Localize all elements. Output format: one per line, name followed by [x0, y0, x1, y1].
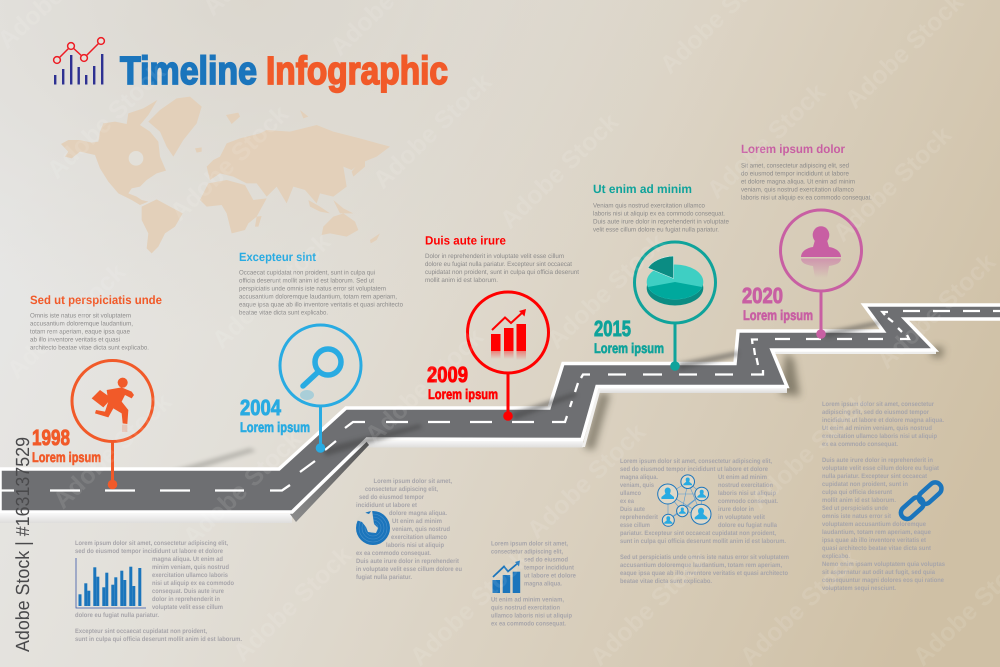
- text block: Excepteur sint: perspiciatis unde omnis iste natus error sit voluptatem: [239, 286, 386, 292]
- watermarks: Adobe Stock: [207, 228, 336, 354]
- pin: [280, 325, 361, 453]
- text: Duis aute irure dolor in reprehenderit: [356, 558, 460, 565]
- text block: Excepteur sint: officia deserunt mollit anim id est laborum. Sed ut: [239, 278, 374, 284]
- text block: Ut enim ad minim: [593, 182, 729, 234]
- text block: Duis aute irure: [425, 234, 579, 284]
- milestone 2015: [594, 242, 716, 371]
- text: explicabo.: [822, 553, 850, 560]
- text: pariatur. Excepteur sint occaecat cupidatat non proident,: [620, 530, 776, 537]
- text: ex ea: [620, 498, 634, 505]
- watermarks: Adobe Stock: [522, 418, 651, 544]
- text: Sed ut perspiciatis unde: [822, 505, 888, 512]
- road: [0, 305, 1000, 523]
- text: Ut enim ad minim: [718, 474, 767, 481]
- text: sed do eiusmod tempor incididunt ut labore et dolore: [75, 548, 223, 555]
- text: ullamco: [620, 490, 641, 497]
- icon: runner: [92, 378, 134, 432]
- text: Lorem ipsum dolor sit amet,: [374, 478, 452, 485]
- text: Sed ut perspiciatis unde omnis iste natus error sit voluptatem: [620, 554, 789, 561]
- lower text block with radial icon: [356, 478, 462, 581]
- text: esse cillum: [620, 522, 650, 529]
- icon: magnifier: [300, 349, 341, 400]
- text: magna aliqua. Ut enim ad: [152, 556, 223, 563]
- text: veniam, quis: [620, 482, 654, 489]
- text block: Duis aute irure: mollit anim id est laborum.: [425, 277, 498, 284]
- milestone 2020: [742, 210, 862, 339]
- lower text block with bar chart: [75, 540, 242, 643]
- text: dolore eu fugiat nulla pariatur.: [75, 612, 159, 619]
- text: Ut enim ad minim veniam, quis nostrud: [822, 425, 932, 432]
- text: consectetur adipiscing elit,: [491, 548, 563, 556]
- text: ex ea commodo consequat.: [356, 550, 431, 557]
- icon: rising bars: [491, 309, 526, 360]
- label: Lorem ipsum: [32, 449, 101, 465]
- watermarks: Adobe Stock: [542, 228, 671, 354]
- year: 2009: [427, 362, 468, 387]
- watermarks: Adobe Stock: [368, 68, 497, 194]
- text: consectetur adipiscing elit,: [365, 486, 438, 493]
- text: laboris nisi ut aliquip: [718, 490, 776, 497]
- text: Lorem ipsum dolor sit amet, consectetur adipiscing elit,: [620, 458, 772, 465]
- title: [120, 49, 448, 93]
- text: voluptatem sequi nesciunt.: [822, 585, 896, 592]
- text: dolor in reprehenderit in: [152, 596, 220, 603]
- watermarks: Adobe Stock: [178, 425, 307, 551]
- icon: radial chart: [356, 510, 390, 545]
- text: in voluptate velit: [718, 514, 766, 521]
- text: voluptate velit esse cillum dolore eu fugiat: [822, 465, 940, 472]
- lower text block with growth icon: [491, 540, 576, 628]
- text: cupidatat non proident, sunt in: [822, 481, 908, 488]
- lower text block with chain icon: [822, 401, 945, 592]
- watermarks: Adobe Stock: [2, 258, 131, 384]
- text block: Duis aute irure: cupidatat non proident, sunt in culpa qui officia deserunt: [425, 269, 579, 276]
- text: reprehenderit: [620, 514, 659, 521]
- text block: Duis aute irure: Dolor in reprehenderit in voluptate velit esse cillum: [425, 253, 564, 260]
- text: culpa qui officia deserunt: [822, 489, 893, 496]
- watermarks: Adobe Stock: [495, 108, 624, 234]
- text: Lorem ipsum dolor sit amet, consectetur: [822, 401, 934, 408]
- year: 2004: [240, 395, 282, 420]
- vertical stock id: Adobe Stock | #163137529: [13, 437, 34, 652]
- icon: bar chart: [76, 558, 146, 608]
- lower text block with network icon: [620, 458, 789, 585]
- text block: Excepteur sint: accusantium doloremque laudantium, totam rem aperiam,: [239, 294, 397, 300]
- text block: Sed ut perspiciatis unde: architecto beatae vitae dicta sunt explicabo.: [30, 344, 149, 352]
- text: minim veniam, quis nostrud: [152, 564, 229, 571]
- text block: Sed ut perspiciatis unde: Omnis iste natus error sit voluptatem: [30, 312, 131, 320]
- text: nostrud exercitation: [718, 482, 773, 489]
- icon: people network: [658, 475, 711, 526]
- text: irure dolor in: [718, 506, 754, 513]
- text: mollit anim id est laborum.: [822, 497, 896, 504]
- label: Lorem ipsum: [428, 386, 498, 402]
- text: sit aspernatur aut odit aut fugit, sed quia: [822, 569, 935, 576]
- text: sunt in culpa qui officia deserunt mollit anim id est laborum.: [620, 538, 786, 545]
- text: voluptatem accusantium doloremque: [822, 521, 926, 528]
- text: consequat. Duis aute irure: [152, 588, 224, 595]
- title: Infographic: [266, 49, 448, 93]
- text: exercitation ullamco: [391, 534, 447, 541]
- text: [822, 401, 945, 592]
- text: beatae vitae dicta sunt explicabo.: [620, 578, 712, 585]
- watermarks: Adobe Stock: [42, 58, 171, 184]
- text: Nemo enim ipsam voluptatem quia voluptas: [822, 561, 945, 568]
- year: 1998: [32, 425, 70, 450]
- text block: Sed ut perspiciatis unde: totam rem aperiam, eaque ipsa quae: [30, 328, 130, 336]
- text: Lorem ipsum dolor sit amet, consectetur adipiscing elit,: [75, 540, 228, 547]
- text: veniam, quis nostrud: [392, 526, 450, 533]
- text block: Duis aute irure: Duis aute irure: [425, 234, 506, 248]
- text: Lorem ipsum dolor sit amet,: [491, 540, 568, 548]
- icon: growth chart: [492, 560, 520, 593]
- text: [620, 458, 789, 585]
- text: dolore magna aliqua.: [389, 510, 447, 517]
- text block: Duis aute irure: dolore eu fugiat nulla pariatur. Excepteur sint occaecat: [425, 261, 572, 268]
- text block: Sed ut perspiciatis unde: Sed ut perspiciatis unde: [30, 293, 162, 307]
- milestone 2009: [427, 292, 548, 421]
- text block: Excepteur sint: [239, 250, 403, 316]
- text: in voluptate velit esse cillum dolore eu: [356, 566, 462, 573]
- icon: 3D pie chart: [647, 256, 703, 306]
- text block: Sed ut perspiciatis unde: [30, 293, 162, 352]
- text block: Excepteur sint: Excepteur sint: [239, 250, 316, 264]
- text: tempor incididunt: [524, 564, 575, 572]
- text: eaque ipsa quae ab illo inventore veritatis et quasi architecto: [620, 570, 788, 577]
- text block: Ut enim ad minim: Veniam quis nostrud exercitation ullamco: [593, 202, 705, 210]
- text: sunt in culpa qui officia deserunt mollit anim id est laborum.: [75, 636, 242, 643]
- text: ex ea commodo consequat.: [822, 441, 898, 448]
- text: incididunt ut labore et dolore magna aliqua.: [822, 417, 944, 424]
- text: laudantium, totam rem aperiam, eaque: [822, 529, 931, 536]
- text: voluptate velit esse cillum: [152, 604, 223, 611]
- label: Lorem ipsum: [594, 340, 664, 356]
- watermarks: Adobe Stock: [165, 100, 294, 226]
- text: sed do eiusmod tempor incididunt ut labore et dolore: [620, 466, 768, 473]
- text block: Lorem ipsum dolor: Sit amet, consectetur adipiscing elit, sed: [741, 162, 849, 170]
- text block: Ut enim ad minim: laboris nisi ut aliquip ex ea commodo consequat.: [593, 210, 725, 218]
- text block: Excepteur sint: eaque ipsa quae ab illo inventore veritatis et quasi architecto: [239, 302, 403, 308]
- text: Ut enim ad minim: [392, 518, 442, 525]
- text: Ut enim ad minim veniam,: [491, 596, 564, 604]
- pin shadows on road: [322, 321, 880, 456]
- text: exercitation ullamco laboris: [152, 572, 228, 579]
- watermarks: Adobe Stock: [872, 248, 1000, 374]
- text: Duis aute: [620, 506, 645, 513]
- watermarks: Adobe Stock: [828, 121, 957, 247]
- text: exercitation ullamco laboris nisi ut aliquip: [822, 433, 937, 440]
- year: 2015: [594, 316, 631, 341]
- watermarks: Adobe Stock: [48, 388, 177, 514]
- text: [491, 540, 576, 628]
- text: quasi architecto beatae vitae dicta sunt: [822, 545, 932, 552]
- text block: Sed ut perspiciatis unde: ab illo inventore veritatis et quasi: [30, 336, 120, 344]
- icon: chain link: [898, 480, 944, 522]
- icon: title chart: [54, 38, 104, 84]
- watermarks: Adobe Stock: [745, 388, 874, 514]
- text: laboris nisi ut aliquip: [386, 542, 444, 549]
- text: [75, 540, 242, 643]
- label: Lorem ipsum: [240, 419, 310, 435]
- text: nulla pariatur. Excepteur sint occaecat: [822, 473, 928, 480]
- road centre dashes: [0, 311, 1000, 490]
- road surface: [0, 305, 1000, 512]
- text block: Lorem ipsum dolor: do eiusmod tempor incididunt ut labore: [741, 170, 849, 178]
- text: nisi ut aliquip ex ea commodo: [152, 580, 234, 587]
- text block: Excepteur sint: Occaecat cupidatat non proident, sunt in culpa qui: [239, 270, 375, 276]
- text block: Ut enim ad minim: Duis aute irure dolor in reprehenderit in voluptate: [593, 218, 729, 226]
- text block: Lorem ipsum dolor: [741, 142, 872, 202]
- road shadows: [116, 346, 944, 494]
- text: incididunt ut labore et: [356, 502, 418, 509]
- pin: [468, 292, 548, 421]
- text: ullamco laboris nisi ut aliquip: [491, 612, 572, 620]
- text: fugiat nulla pariatur.: [356, 574, 412, 581]
- text: magna aliqua.: [620, 474, 658, 481]
- text: ipsa quae ab illo inventore veritatis et: [822, 537, 927, 544]
- icon: person: [801, 226, 841, 278]
- pin: [780, 210, 862, 339]
- world map: [61, 97, 390, 253]
- text: [356, 478, 462, 581]
- watermarks: Adobe Stock: [702, 78, 831, 204]
- text: accusantium doloremque laudantium, totam rem aperiam,: [620, 562, 782, 569]
- text: omnis iste natus error sit: [822, 513, 892, 520]
- text: dolore eu fugiat nulla: [718, 522, 777, 529]
- text block: Lorem ipsum dolor: laboris nisi ut aliquip ex ea commodo consequat.: [741, 194, 872, 202]
- watermarks: Adobe Stock: [228, 541, 357, 667]
- text: sed do eiusmod: [524, 556, 568, 564]
- text: commodo consequat.: [718, 498, 778, 505]
- text: adipiscing elit, sed do eiusmod tempor: [822, 409, 929, 416]
- text: magna aliqua.: [524, 580, 562, 588]
- text block: Lorem ipsum dolor: Lorem ipsum dolor: [741, 142, 845, 156]
- milestone 1998: [32, 360, 153, 489]
- text block: Lorem ipsum dolor: veniam, quis nostrud exercitation ullamco: [741, 186, 854, 194]
- label: Lorem ipsum: [743, 307, 813, 323]
- text block: Lorem ipsum dolor: et dolore magna aliqua. Ut enim ad minim: [741, 178, 855, 186]
- text: ut labore et dolore: [524, 572, 576, 580]
- text: sed do eiusmod tempor: [359, 494, 424, 501]
- text: quis nostrud exercitation: [491, 604, 560, 612]
- text block: Ut enim ad minim: Ut enim ad minim: [593, 182, 692, 196]
- milestone 2004: [240, 325, 361, 453]
- road side faces: [0, 351, 936, 523]
- text block: Excepteur sint: beatae vitae dicta sunt explicabo.: [239, 310, 328, 316]
- pin: [72, 360, 153, 489]
- text: Excepteur sint occaecat cupidatat non proident,: [75, 628, 207, 635]
- text block: Sed ut perspiciatis unde: accusantium doloremque laudantium,: [30, 320, 133, 328]
- year: 2020: [742, 283, 783, 308]
- text: Duis aute irure dolor in reprehenderit in: [822, 457, 933, 464]
- text: consequuntur magni dolores eos qui ratione: [822, 577, 944, 584]
- text: ex ea commodo consequat.: [491, 620, 566, 628]
- title: Timeline: [120, 49, 257, 93]
- watermarks: Adobe Stock: [360, 323, 489, 449]
- text block: Ut enim ad minim: velit esse cillum dolore eu fugiat nulla pariatur.: [593, 226, 719, 234]
- pin: [634, 242, 716, 371]
